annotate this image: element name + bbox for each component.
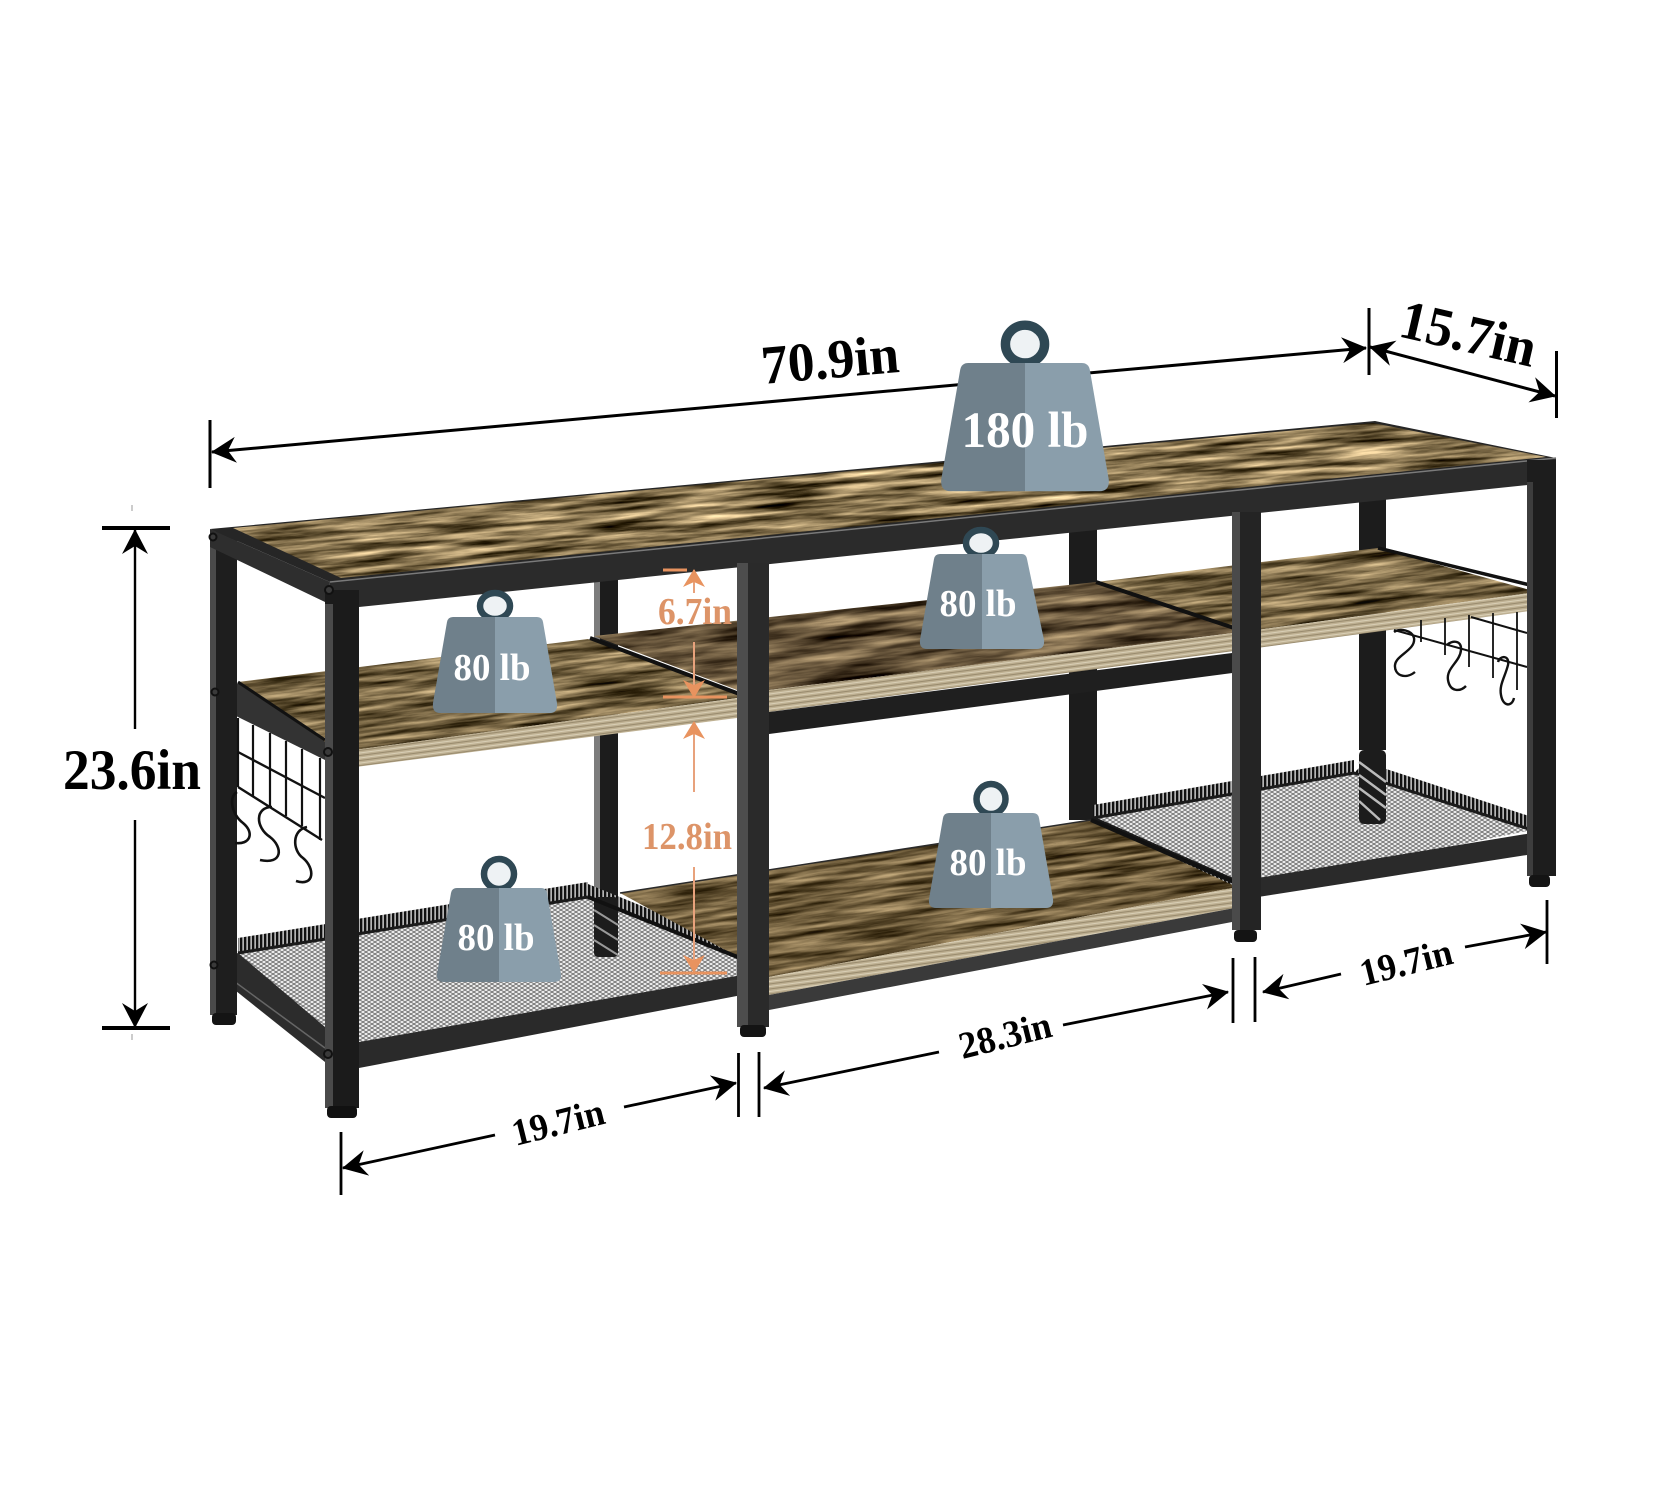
dimension: overall length 70.9in: 70.9in xyxy=(759,323,901,396)
weight: 80 lb middle centre: 80 lb xyxy=(940,583,1016,625)
side wire grid with hooks: left xyxy=(232,718,325,882)
dimension: left section 19.7in: 19.7in xyxy=(508,1091,609,1155)
weight: 80 lb middle left: 80 lb xyxy=(454,647,530,689)
weight: 80 lb bottom left: 80 lb xyxy=(458,917,534,959)
dimension: depth 15.7in xyxy=(1370,288,1556,418)
weight: 80 lb middle left xyxy=(433,593,557,713)
panel: right wire mesh shelf xyxy=(1093,750,1532,897)
weight: 180 lb top xyxy=(941,325,1109,491)
weight: 180 lb top: 180 lb xyxy=(962,403,1088,459)
dimension: height 23.6in xyxy=(63,505,201,1040)
weight: 80 lb bottom left xyxy=(437,859,561,982)
panel: bottom centre wood shelf xyxy=(587,818,1232,1010)
dimension: height 23.6in: 23.6in xyxy=(63,739,201,802)
dimension: lower clearance 12.8in: 12.8in xyxy=(642,816,732,858)
centre-left front post xyxy=(737,563,769,1037)
dimension: right section 19.7in xyxy=(1255,900,1547,1022)
centre-right front post xyxy=(1232,512,1261,942)
dimension: upper clearance 6.7in: 6.7in xyxy=(658,591,732,633)
dimension: left section 19.7in xyxy=(341,1053,738,1195)
panel: middle right wood shelf xyxy=(1100,546,1527,648)
dimension: depth 15.7in: 15.7in xyxy=(1394,288,1542,379)
dimension: centre section 28.3in xyxy=(759,958,1233,1117)
front-left post xyxy=(325,590,359,1118)
side wire grid with hooks: right xyxy=(1394,612,1527,704)
weight: 80 lb bottom centre: 80 lb xyxy=(950,842,1026,884)
panel: left wire mesh shelf xyxy=(216,882,742,1068)
dimension: overall length 70.9in xyxy=(210,308,1369,488)
infographic: shelf dimensions and load capacity xyxy=(65,304,1558,1195)
back posts xyxy=(594,495,1386,957)
dimension: right section 19.7in: 19.7in xyxy=(1356,931,1457,995)
dimension: upper clearance 6.7in xyxy=(658,570,732,697)
panel: middle left wood shelf xyxy=(237,636,737,766)
frame bolts xyxy=(210,534,333,1058)
dimension: centre section 28.3in: 28.3in xyxy=(955,1004,1056,1068)
weight: 80 lb middle centre xyxy=(920,530,1044,649)
panel: middle centre wood shelf xyxy=(594,580,1232,734)
weight: 80 lb bottom centre xyxy=(929,784,1053,908)
back-left post xyxy=(210,530,237,1025)
panel: top wood surface and frame xyxy=(210,421,1556,607)
right front post xyxy=(1527,460,1556,887)
